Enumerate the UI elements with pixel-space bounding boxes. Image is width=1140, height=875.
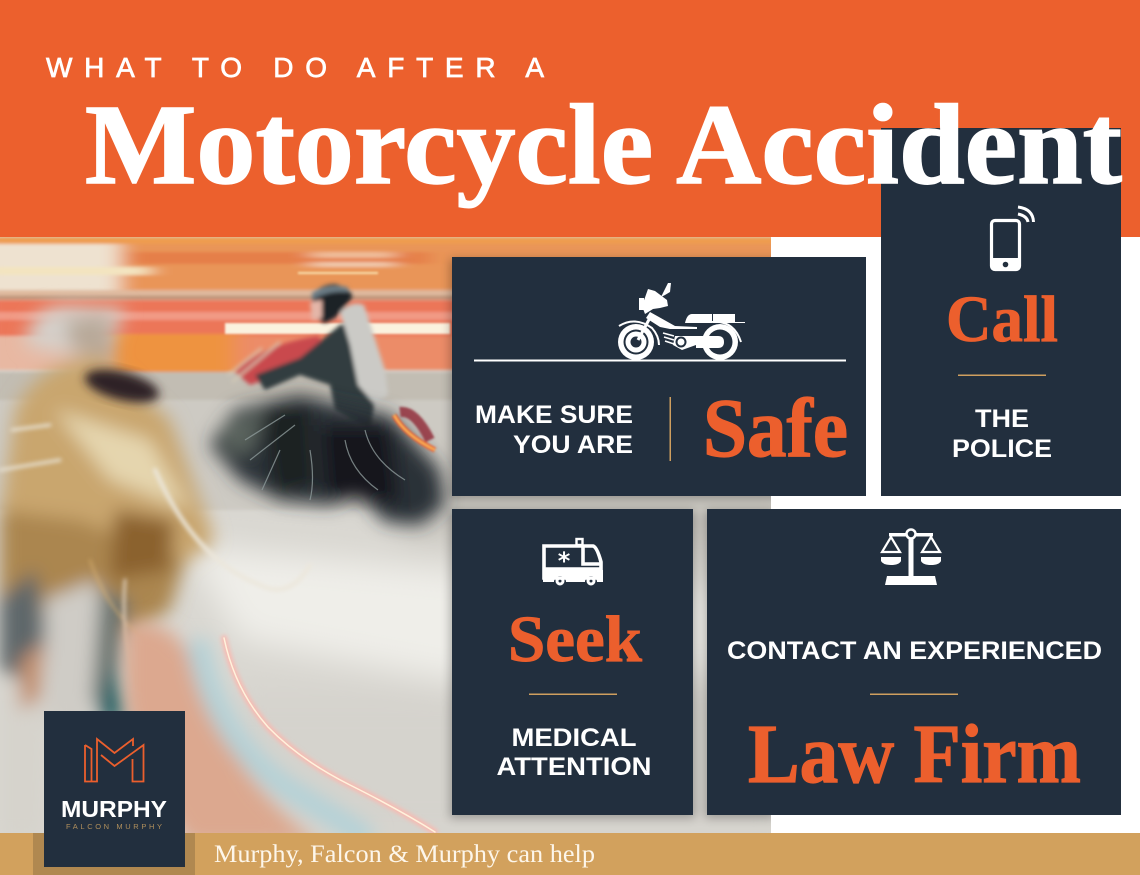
heading: Call: Call	[946, 283, 1058, 356]
text: footer tagline: Murphy, Falcon & Murphy can help	[214, 841, 595, 868]
icon: M monogram	[85, 739, 144, 782]
text: make sure you are	[475, 401, 633, 459]
heading: Law Firm: Law Firm	[748, 708, 1081, 801]
background photo: blurred motorcycle street scene	[0, 237, 771, 833]
title: motorcycle accident: Motorcycle Accident	[85, 81, 1122, 208]
text: medical attention	[496, 724, 652, 781]
panel: make sure you are safe	[452, 257, 866, 496]
panel: seek medical attention	[452, 509, 693, 815]
photo detail: light trail	[224, 638, 435, 832]
logo block	[44, 711, 185, 867]
panel: call the police	[881, 128, 1121, 496]
photo detail: pale road glow	[196, 510, 707, 684]
title: what to do after a: WHAT TO DO AFTER A	[46, 52, 552, 83]
text: FALCON MURPHY: FALCON MURPHY	[66, 822, 162, 831]
photo detail: headlight streak	[225, 272, 450, 334]
text: medical attention: MEDICAL	[512, 724, 636, 752]
photo detail: left figure	[0, 296, 224, 719]
text: make sure you are: MAKE SURE	[475, 401, 633, 429]
text: contact an experienced: CONTACT AN EXPERIENCED	[727, 637, 1102, 665]
photo detail: coloured motion trails	[125, 623, 370, 845]
panel drop shadows	[444, 254, 771, 824]
icon: motorcycle	[618, 283, 745, 360]
footer band	[0, 833, 1140, 875]
heading: Safe: Safe	[703, 382, 848, 475]
photo detail: motorcycle and rider	[228, 284, 388, 430]
text: make sure you are: YOU ARE	[513, 431, 633, 459]
photo detail: coat collar	[82, 363, 162, 409]
icon: smartphone with signal	[991, 207, 1034, 271]
text: the police	[952, 405, 1052, 463]
text: the police: POLICE	[952, 435, 1052, 463]
text: the police: THE	[975, 405, 1029, 433]
icon: ambulance: *	[558, 547, 571, 575]
panel: contact an experienced law firm	[707, 509, 1121, 815]
text: medical attention: ATTENTION	[496, 753, 652, 781]
header band	[0, 0, 1140, 237]
photo detail: coat highlights	[0, 421, 300, 644]
icon: scales of justice	[881, 530, 941, 585]
photo detail: motorcycle tail light	[394, 412, 435, 450]
heading: Seek: Seek	[508, 603, 642, 676]
icon: ambulance	[543, 539, 603, 584]
photo detail: bike streaks	[245, 415, 405, 500]
text: MURPHY: MURPHY	[61, 796, 167, 822]
